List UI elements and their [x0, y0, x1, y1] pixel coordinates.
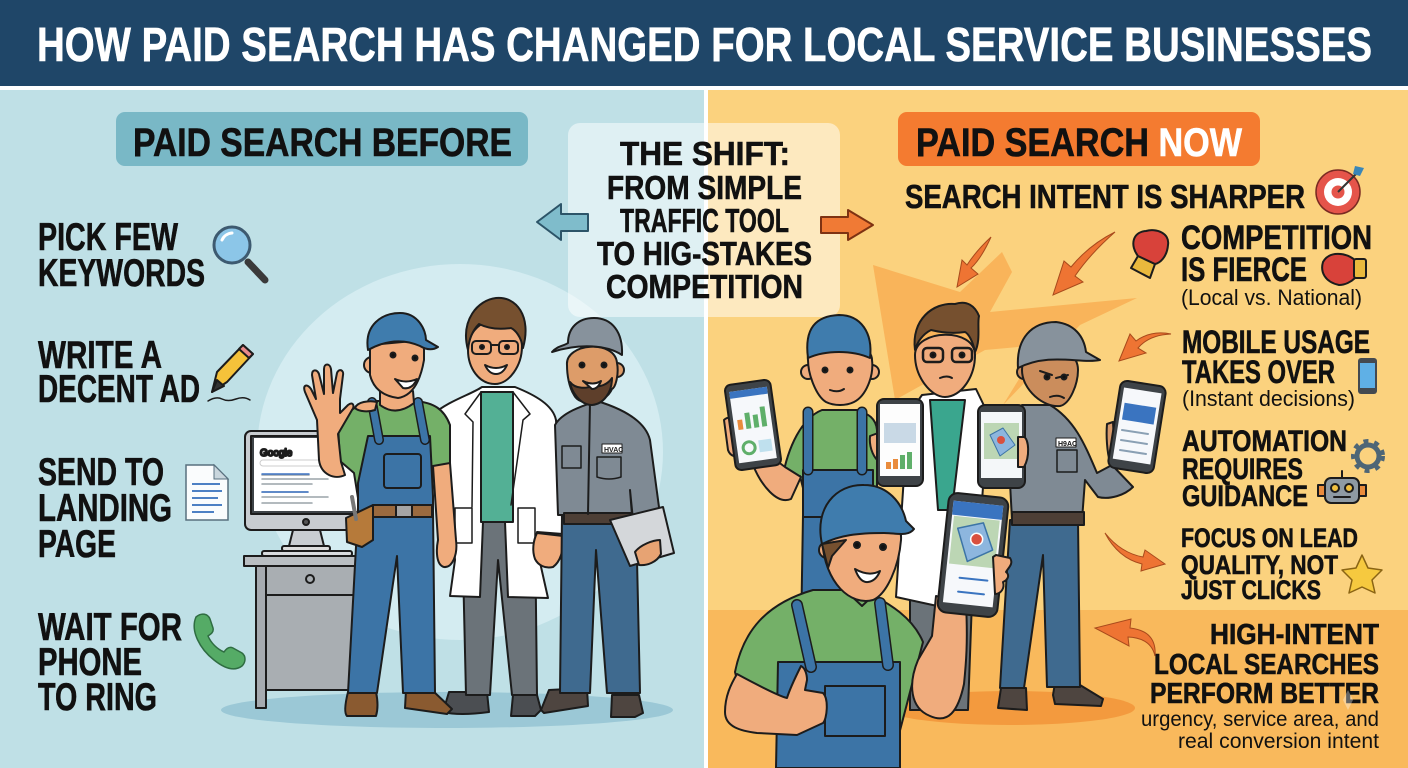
icon: star — [1342, 555, 1382, 593]
title banner — [0, 0, 1408, 86]
text: mobile usage takes over — [1182, 324, 1370, 411]
icon: document — [186, 465, 228, 520]
heading: paid search now: PAID SEARCH NOW — [916, 121, 1242, 165]
illustration: HVAC technician with clipboard — [541, 318, 674, 717]
illustration: doctor in white coat — [432, 298, 563, 716]
illustration: technician holding phones: H9AC — [1058, 441, 1077, 448]
text: write a decent ad: DECENT AD — [38, 368, 200, 411]
illustration: desktop computer on desk: Google — [260, 448, 293, 459]
text: search intent is sharper: SEARCH INTENT IS SHARPER — [905, 178, 1305, 215]
text: wait for phone to ring: TO RING — [38, 676, 157, 719]
icon: phone brain report — [1107, 380, 1167, 474]
text: high-intent local searches: real conversion intent — [1178, 730, 1379, 753]
arrow: high-intent — [1095, 619, 1155, 656]
text: wait for phone to ring: WAIT FOR — [38, 606, 182, 649]
illustration: worker with phone, back left — [753, 315, 879, 635]
illustration: doctor holding phones — [896, 303, 988, 710]
icon: gear — [1353, 441, 1383, 471]
callout: the shift — [568, 123, 840, 317]
callout: the shift: FROM SIMPLE — [607, 169, 802, 206]
callout: the shift: THE SHIFT: — [620, 135, 790, 172]
text: write a decent ad — [38, 334, 200, 411]
illustration: desktop computer on desk — [244, 431, 357, 708]
text: send to landing page: SEND TO — [38, 451, 164, 494]
text: send to landing page: PAGE — [38, 523, 116, 566]
text: wait for phone to ring — [38, 606, 182, 719]
text: competition is fierce — [1181, 219, 1372, 310]
icon: mobile phone — [1358, 358, 1377, 394]
text: mobile usage takes over: TAKES OVER — [1182, 354, 1335, 390]
illustration: HVAC technician with clipboard: HVAC — [604, 447, 623, 454]
text: wait for phone to ring: PHONE — [38, 641, 142, 684]
text: automation requires guidance — [1182, 425, 1347, 513]
icon: target with dart — [1316, 166, 1364, 214]
arrow: mobile — [1119, 333, 1171, 361]
panel: now background — [708, 90, 1408, 768]
text: send to landing page: LANDING — [38, 487, 172, 530]
icon: magnifying glass — [214, 227, 265, 280]
arrow: lead quality — [1105, 533, 1165, 571]
text: competition is fierce: (Local vs. National) — [1181, 285, 1362, 310]
text: focus on lead quality — [1181, 523, 1358, 605]
icon: boxing glove left — [1131, 230, 1168, 278]
callout: the shift: COMPETITION — [606, 268, 803, 305]
icon: phone map — [978, 405, 1028, 488]
text: mobile usage takes over: (Instant decisions) — [1182, 386, 1355, 411]
text: focus on lead quality: JUST CLICKS — [1181, 575, 1321, 605]
illustration: worker in front with phone and thumbs up — [725, 485, 1011, 768]
heading: paid search before: PAID SEARCH BEFORE — [133, 121, 512, 165]
text: automation requires guidance: AUTOMATION — [1182, 425, 1347, 458]
icon: phone search results — [870, 399, 923, 486]
icon: robot — [1318, 471, 1366, 503]
text: high-intent local searches — [1141, 619, 1379, 753]
icon: pencil — [208, 345, 253, 401]
text: write a decent ad: WRITE A — [38, 334, 162, 377]
text: send to landing page — [38, 451, 172, 566]
text: focus on lead quality: QUALITY, NOT — [1181, 550, 1338, 580]
text: competition is fierce: IS FIERCE — [1181, 251, 1307, 289]
illustration: technician holding phones — [998, 322, 1133, 710]
icon: boxing glove right — [1322, 254, 1366, 285]
icon: telephone handset — [194, 614, 245, 669]
text: automation requires guidance: REQUIRES — [1182, 453, 1303, 486]
text: pick few keywords: KEYWORDS — [38, 252, 205, 295]
arrow: intent to technician — [1053, 232, 1115, 295]
icon: watermark sparkle — [1343, 690, 1353, 710]
text: focus on lead quality: FOCUS ON LEAD — [1181, 523, 1358, 553]
arrow: to now panel — [821, 210, 873, 240]
callout: the shift: TO HIG-STAKES — [597, 235, 812, 272]
arrow: to before panel — [537, 204, 588, 240]
text: high-intent local searches: HIGH-INTENT — [1210, 619, 1379, 651]
arrow: intent to worker — [957, 237, 991, 287]
illustration: handyman waving — [304, 313, 456, 716]
callout: the shift: TRAFFIC TOOL — [620, 202, 789, 239]
text: pick few keywords: PICK FEW — [38, 216, 178, 259]
text: pick few keywords — [38, 216, 205, 295]
icon: phone dashboard — [724, 379, 782, 471]
text: automation requires guidance: GUIDANCE — [1182, 480, 1308, 513]
text: high-intent local searches: urgency, service area, and — [1141, 708, 1379, 731]
panel: before background — [0, 90, 704, 768]
